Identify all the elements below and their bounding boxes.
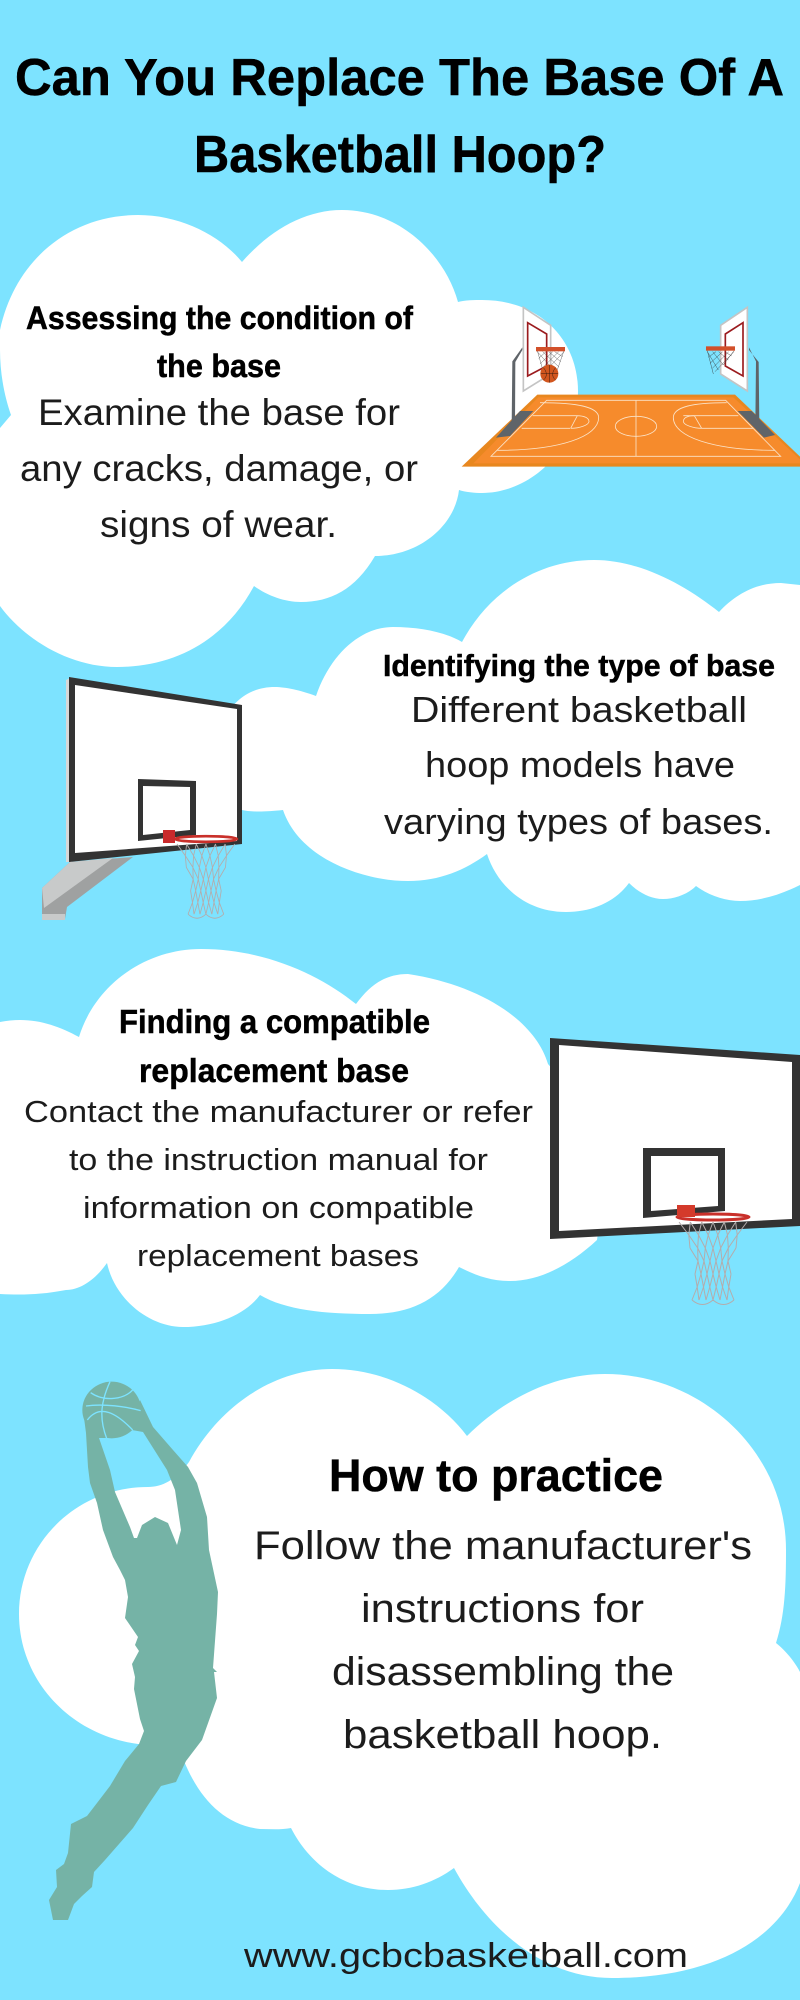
heading: finding a compatible base: replacement base — [139, 1052, 409, 1089]
body: follow the instructions: basketball hoop. — [343, 1713, 662, 1757]
ball — [82, 1382, 141, 1438]
heading: finding a compatible base — [119, 1003, 430, 1089]
rim — [163, 830, 237, 843]
body: different models: Different basketball — [411, 689, 747, 730]
body: contact the manufacturer: Contact the manufacturer or refer — [24, 1094, 533, 1129]
text block: identifying the type of base — [383, 648, 775, 842]
text block: assessing the condition — [20, 300, 418, 545]
heading: identifying the type: Identifying the type of base — [383, 648, 775, 683]
heading: assessing the condition of the base: Assessing the condition of — [26, 300, 413, 336]
body: follow the instructions: instructions for — [361, 1587, 644, 1631]
body: contact the manufacturer: information on compatible — [83, 1190, 474, 1225]
body: examine the base: Examine the base for — [38, 392, 400, 433]
backboard — [66, 677, 242, 862]
body: examine the base: any cracks, damage, or — [20, 448, 418, 489]
net — [177, 844, 235, 918]
body: examine the base — [20, 392, 418, 545]
cloud: lower left panel — [0, 949, 600, 1327]
silhouette — [49, 1400, 218, 1920]
illustration: large backboard with rim and net — [550, 1038, 800, 1304]
illustration: basketball court with two hoops — [462, 307, 800, 467]
cloud: middle right panel — [211, 560, 800, 912]
cloud: top left panel — [0, 210, 578, 667]
cloud: bottom panel — [19, 1369, 800, 1978]
body: follow the instructions — [254, 1524, 752, 1757]
heading: finding a compatible base: Finding a compatible — [119, 1003, 430, 1040]
heading: assessing the condition of the base — [26, 300, 413, 384]
text block: how to practice — [254, 1450, 752, 1757]
body: examine the base: signs of wear. — [100, 504, 337, 545]
body: contact the manufacturer: to the instruction manual for — [69, 1142, 488, 1177]
right hoop — [706, 307, 775, 438]
body: follow the instructions: disassembling the — [332, 1650, 674, 1694]
rim — [677, 1205, 749, 1220]
body: follow the instructions: Follow the manufacturer's — [254, 1524, 752, 1568]
text block: finding a compatible replacement base — [24, 1003, 533, 1273]
court floor — [462, 395, 800, 467]
website url: www.gcbcbasketball.com — [243, 1937, 688, 1975]
body: different models: hoop models have — [425, 744, 735, 785]
heading: assessing the condition of the base: the base — [157, 348, 281, 384]
backboard — [550, 1038, 800, 1239]
body: different models: varying types of bases. — [384, 801, 773, 842]
illustration: player silhouette dunking a ball — [49, 1382, 218, 1920]
illustration: angled backboard with arm and net — [42, 677, 242, 920]
body: contact the manufacturer — [24, 1094, 533, 1273]
heading: how to practice: How to practice — [329, 1450, 663, 1501]
net — [679, 1222, 747, 1304]
title: Can You Replace The Base Of A — [15, 49, 784, 107]
left hoop — [496, 307, 565, 438]
support arm — [42, 857, 133, 920]
title: Basketball Hoop? — [194, 126, 606, 184]
body: contact the manufacturer: replacement bases — [137, 1238, 419, 1273]
title — [15, 49, 784, 184]
body: different models — [384, 689, 773, 842]
